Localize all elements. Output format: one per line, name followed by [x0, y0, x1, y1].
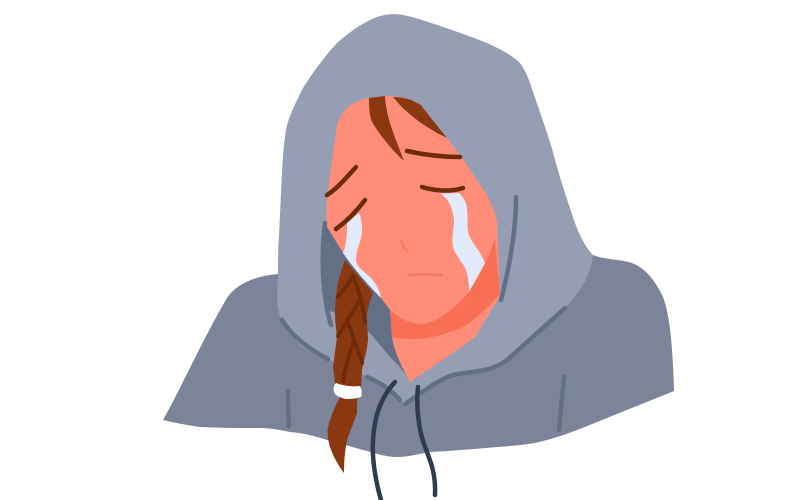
hoodie body: [163, 255, 674, 457]
hood: [277, 14, 593, 404]
hair tie: [334, 383, 362, 399]
mouth: [409, 273, 441, 276]
eyebrow, eyelid and hair lines: [327, 151, 463, 229]
face and neck: [326, 96, 500, 382]
hood inner shadow: [323, 222, 408, 378]
nose: [401, 241, 408, 251]
left tear: [343, 213, 381, 298]
hood seam lines: [282, 197, 565, 430]
bangs: [369, 96, 447, 161]
drawstrings: [373, 382, 435, 500]
right tear: [440, 193, 485, 292]
neck shadow band: [390, 238, 500, 339]
braid strands: [338, 277, 365, 382]
braid: [328, 260, 373, 473]
